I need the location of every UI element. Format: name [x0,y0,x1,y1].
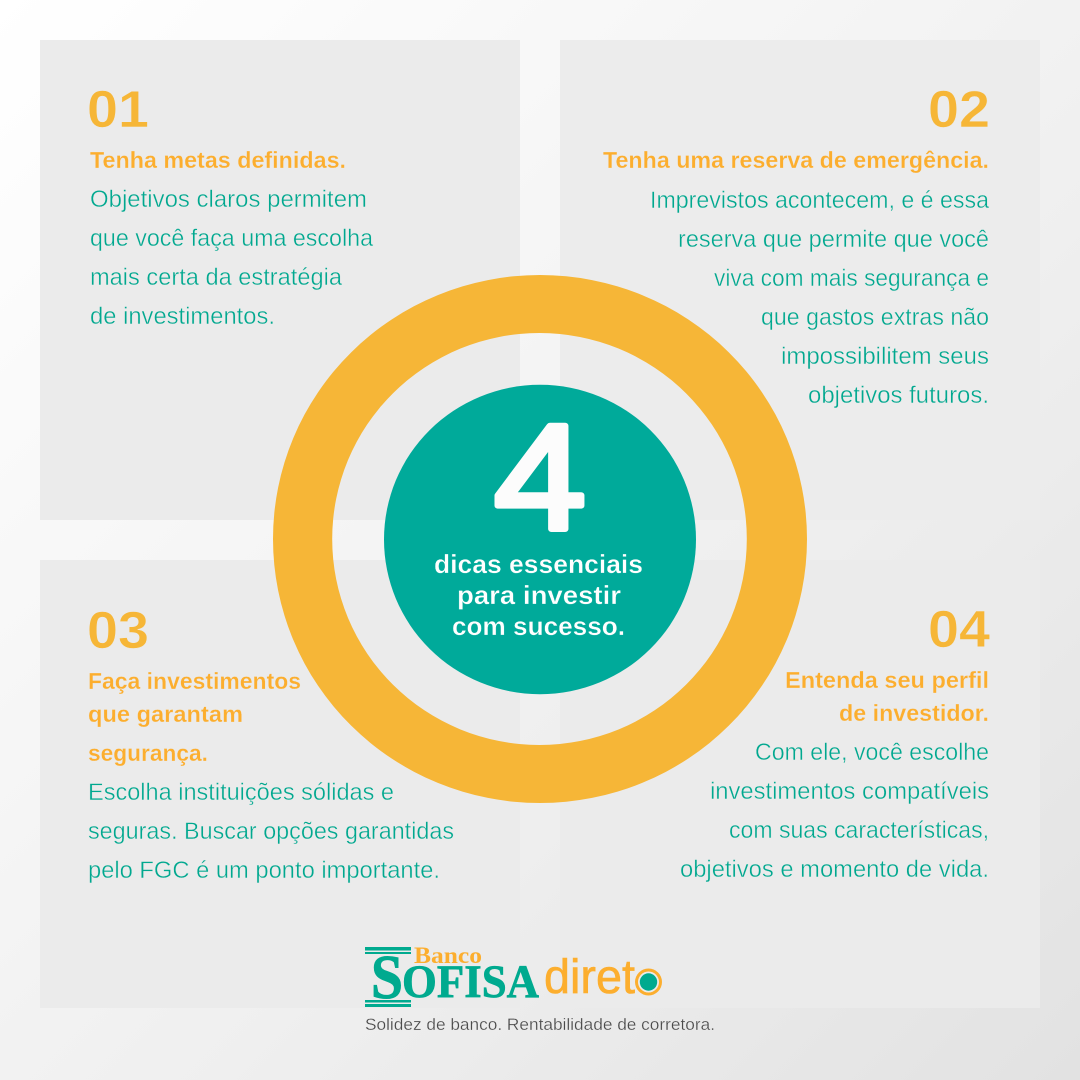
tip 04 text [680,601,990,883]
panel: tip 04 background [560,560,1040,1008]
body 02 [650,187,990,409]
tip 02 text [603,81,990,409]
orange ring [273,275,807,803]
heading 04: Entenda seu perfil [785,667,989,693]
title text: dicas essenciais [434,549,643,579]
number 03: 03 [87,602,149,660]
heading 04 [785,667,989,726]
logo: Banco Sofisa direto: S [371,944,403,1012]
heading 01: Tenha metas definidas. [90,147,346,173]
body 02: viva com mais segurança e [714,265,989,292]
body 01: Objetivos claros permitem [90,186,367,213]
title text: para investir [457,580,621,610]
panel: tip 02 background [560,40,1040,520]
body 01: mais certa da estratégia [90,264,343,291]
body 03 [88,779,454,884]
body 03: pelo FGC é um ponto importante. [88,857,440,884]
body 01 [90,186,374,330]
panel: tip 03 background [40,560,520,1008]
logo: Banco Sofisa direto: diret [544,951,635,1004]
tip 01 text [87,81,374,330]
body 04: objetivos e momento de vida. [680,856,989,883]
body 01: de investimentos. [90,303,275,330]
number 02: 02 [928,81,990,139]
center teal circle with title [384,385,696,694]
body 03: Escolha instituições sólidas e [88,779,394,806]
body 04: Com ele, você escolhe [755,739,989,766]
body 02: reserva que permite que você [678,226,989,253]
heading 03 [88,668,301,766]
body 04 [680,739,989,883]
tip 03 text [87,602,454,884]
big number 4: 4 [494,393,586,561]
heading 03: que garantam [88,701,243,727]
panel: tip 01 background [40,40,520,520]
logo: Banco Sofisa direto: Banco [414,943,482,968]
logo: Banco Sofisa direto [365,943,662,1012]
body 02: Imprevistos acontecem, e é essa [650,187,990,214]
body 03: seguras. Buscar opções garantidas [88,818,454,845]
number 04: 04 [928,601,990,659]
heading 03: segurança. [88,740,208,766]
title text [434,549,643,641]
body 04: com suas características, [729,817,989,844]
logo: Banco Sofisa direto: OFISA [402,956,539,1008]
body 02: impossibilitem seus [781,343,989,370]
title text: com sucesso. [452,611,625,641]
number 01: 01 [87,81,149,139]
body 01: que você faça uma escolha [90,225,374,252]
heading 02: Tenha uma reserva de emergência. [603,147,989,173]
heading 03: Faça investimentos [88,668,301,694]
body 02: que gastos extras não [761,304,989,331]
heading 04: de investidor. [839,700,989,726]
body 04: investimentos compatíveis [710,778,989,805]
body 02: objetivos futuros. [808,382,989,409]
tagline: Solidez de banco. Rentabilidade de corretora. [365,1015,715,1034]
